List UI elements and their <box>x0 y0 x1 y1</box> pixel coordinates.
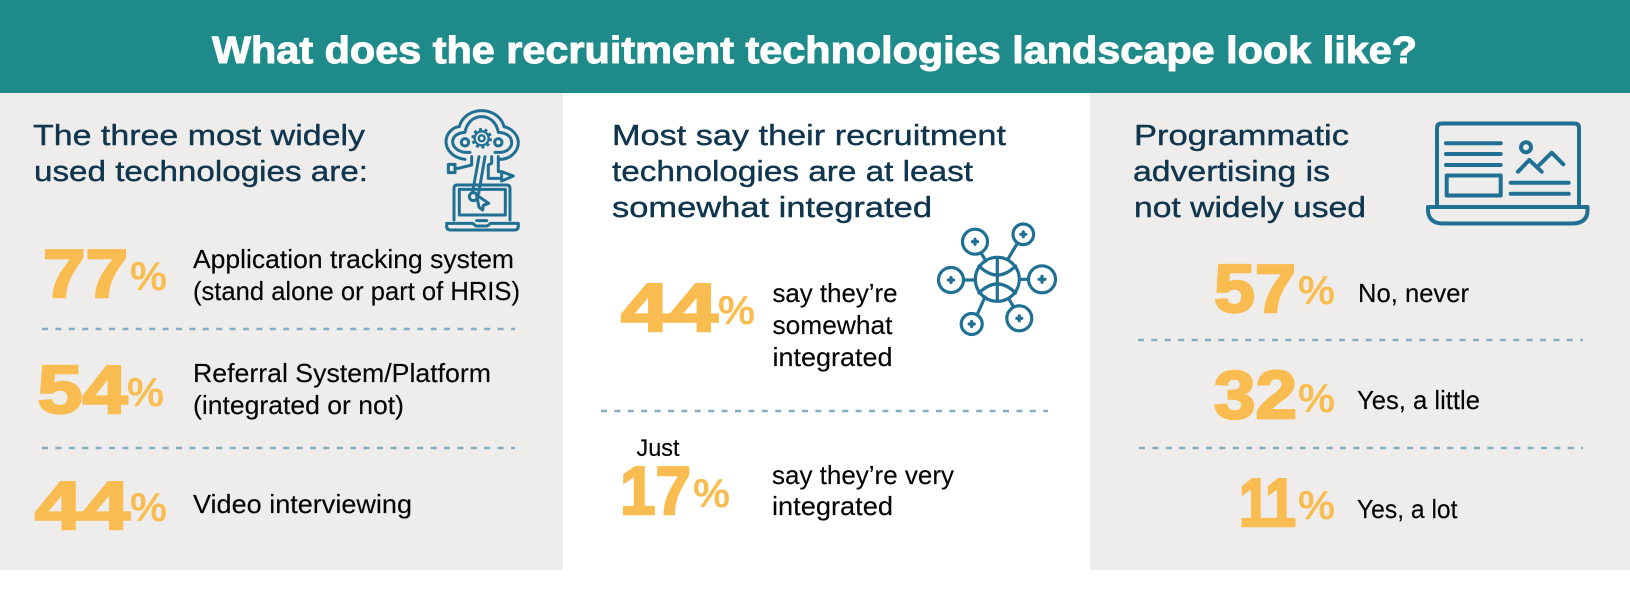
stat: 44% somewhat integrated <box>621 270 898 372</box>
panel heading: somewhat integrated <box>612 192 932 224</box>
32 percent figure <box>1214 357 1335 433</box>
44 percent description: Video interviewing <box>193 489 412 519</box>
54 percent description: Referral System/Platform <box>193 358 491 388</box>
44 percent figure: % <box>130 484 167 530</box>
icon: network globe <box>938 224 1056 334</box>
panel heading: used technologies are: <box>34 156 368 188</box>
44 percent figure: 44 <box>35 468 130 544</box>
stat: 44% video interviewing <box>35 468 412 544</box>
54 percent figure: % <box>127 369 164 415</box>
44 percent figure: % <box>718 287 755 333</box>
stat: 57% no, never <box>1214 251 1469 327</box>
57 percent description: No, never <box>1358 278 1469 308</box>
header banner <box>0 0 1630 93</box>
11 percent figure: % <box>1298 482 1335 528</box>
stat: 54% referral system <box>38 352 491 428</box>
57 percent figure <box>1214 251 1335 327</box>
17 percent figure: % <box>693 470 730 516</box>
label: just: Just <box>636 435 680 462</box>
44 percent figure <box>35 468 167 544</box>
icon: laptop with web page <box>1428 124 1588 224</box>
stat: 32% yes, a little <box>1214 357 1480 433</box>
17 percent figure <box>620 453 730 529</box>
17 percent description: say they’re very <box>772 460 954 490</box>
icon: cloud, gear and laptop <box>446 111 518 230</box>
54 percent figure <box>38 352 164 428</box>
panel heading: technologies are at least <box>612 156 973 188</box>
57 percent figure: % <box>1298 267 1335 313</box>
44 percent figure <box>621 270 755 346</box>
11 percent figure <box>1239 465 1335 541</box>
11 percent figure: 1 <box>1265 465 1296 541</box>
panel heading: The three most widely <box>33 120 366 152</box>
54 percent description: (integrated or not) <box>193 390 404 420</box>
stat: 11% yes, a lot <box>1239 465 1458 541</box>
17 percent figure: 17 <box>620 453 691 529</box>
32 percent description: Yes, a little <box>1357 385 1480 415</box>
17 percent description: integrated <box>772 491 893 521</box>
32 percent figure: % <box>1298 375 1335 421</box>
11 percent description: Yes, a lot <box>1357 494 1458 524</box>
panel heading: Programmatic <box>1134 120 1349 152</box>
panel heading: advertising is <box>1133 156 1330 188</box>
stat: 77% application tracking system <box>43 236 520 312</box>
57 percent figure: 57 <box>1214 251 1296 327</box>
77 percent description: (stand alone or part of HRIS) <box>193 276 520 306</box>
77 percent figure <box>43 236 167 312</box>
77 percent figure: 77 <box>43 236 128 312</box>
panel: programmatic advertising <box>1090 93 1630 570</box>
panel heading: Most say their recruitment <box>612 120 1006 152</box>
32 percent figure: 32 <box>1214 357 1297 433</box>
77 percent description: Application tracking system <box>193 244 514 274</box>
stat: just 17% very integrated <box>620 435 954 529</box>
44 percent description: integrated <box>772 342 892 372</box>
panel heading: not widely used <box>1134 192 1366 224</box>
panel: integration of recruitment technologies <box>563 93 1090 570</box>
11 percent figure: 1 <box>1239 465 1270 541</box>
44 percent description: somewhat <box>772 310 893 340</box>
44 percent figure: 44 <box>621 270 718 346</box>
77 percent figure: % <box>130 253 167 299</box>
title: What does the recruitment technologies landscape look like? <box>212 30 1417 72</box>
44 percent description: say they’re <box>772 278 898 308</box>
panel: most widely used technologies <box>0 93 563 570</box>
54 percent figure: 54 <box>38 352 128 428</box>
